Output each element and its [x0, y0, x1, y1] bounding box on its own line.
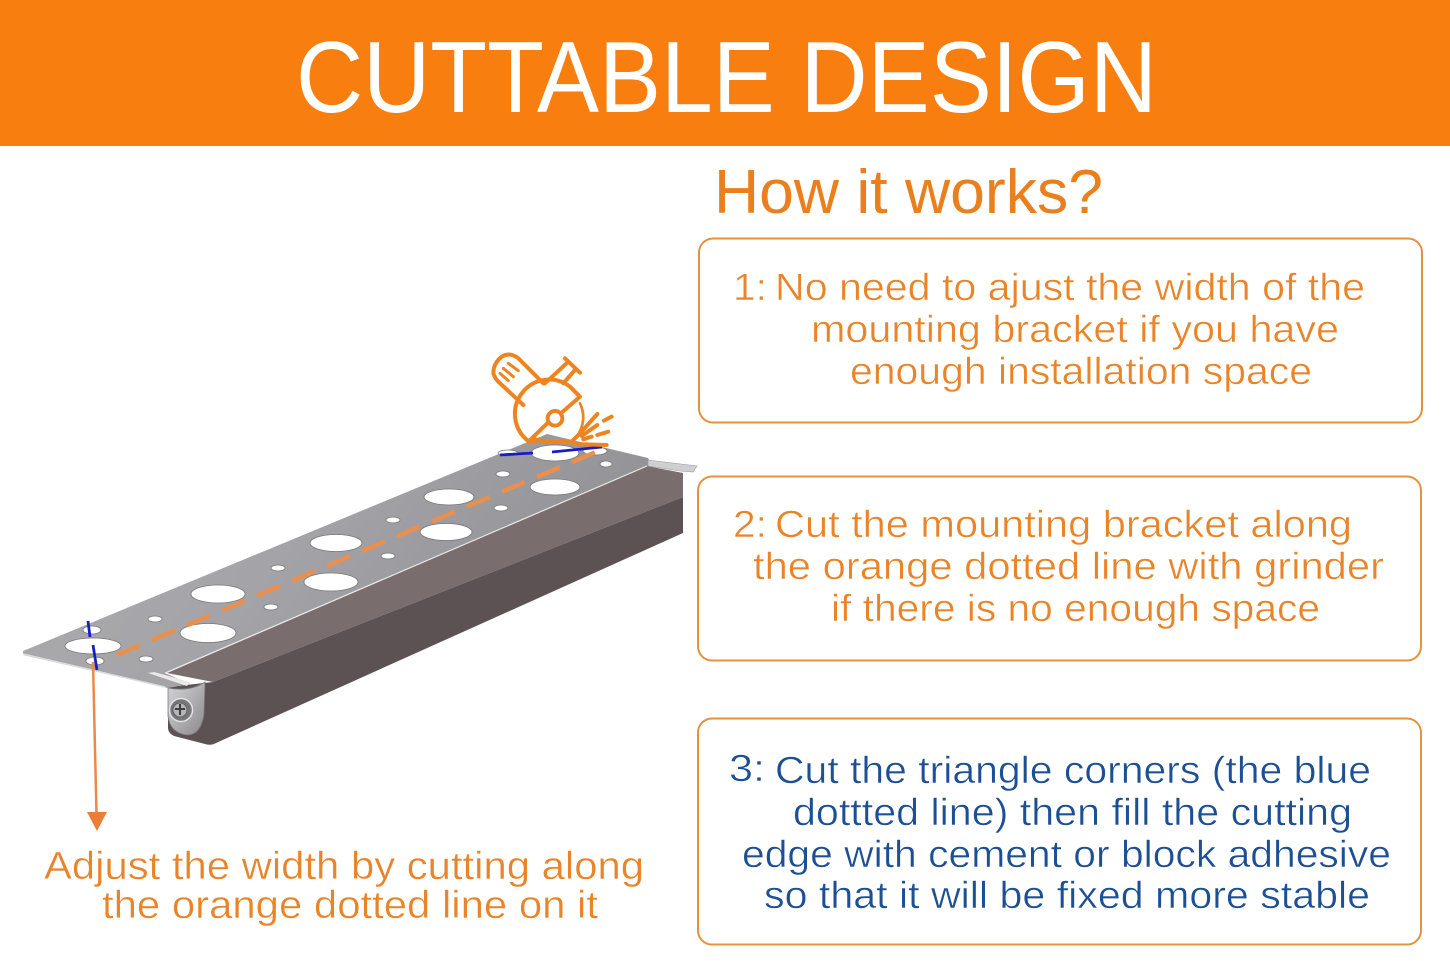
step 1 text: mounting bracket if you have — [811, 309, 1339, 351]
blue dotted cut lines — [88, 447, 602, 670]
caption: Adjust the width by cutting along — [44, 845, 644, 888]
step 1 text — [733, 267, 1365, 393]
metal plate with holes — [23, 434, 652, 688]
end bracket with screw — [168, 682, 205, 735]
panel: step 1 — [699, 238, 1422, 422]
step 1 text: No need to ajust the width of the — [775, 267, 1365, 309]
mounting bracket illustration — [23, 434, 697, 745]
heading: how it works: How it works? — [714, 158, 1103, 227]
step 3 text: so that it will be fixed more stable — [764, 875, 1370, 917]
caption — [44, 845, 644, 927]
right bent tab — [648, 460, 697, 472]
panel: step 2 — [698, 476, 1421, 660]
step 2 text: the orange dotted line with grinder — [753, 546, 1384, 588]
step 3 text: dottted line) then fill the cutting — [793, 792, 1352, 834]
step 2 text: if there is no enough space — [831, 588, 1320, 630]
step 3 text: Cut the triangle corners (the blue — [775, 750, 1371, 792]
arrow: bracket to caption — [87, 662, 107, 831]
step 2 text — [733, 504, 1384, 630]
step 3 text: edge with cement or block adhesive — [742, 834, 1391, 876]
step 3 text: 3: — [729, 748, 765, 790]
step 1 text: enough installation space — [850, 351, 1312, 393]
step 2 text: Cut the mounting bracket along — [775, 504, 1352, 546]
panel: step 3 — [698, 718, 1421, 944]
title: CUTTABLE DESIGN — [296, 22, 1157, 134]
header banner — [0, 0, 1450, 146]
icon: angle grinder — [493, 355, 612, 445]
left bent tab highlight — [148, 672, 190, 686]
caption: the orange dotted line on it — [102, 884, 598, 927]
orange dotted cut line — [117, 449, 603, 655]
step 3 text — [729, 748, 1391, 917]
step 2 text: 2: — [733, 504, 767, 546]
step 1 text: 1: — [733, 267, 767, 309]
